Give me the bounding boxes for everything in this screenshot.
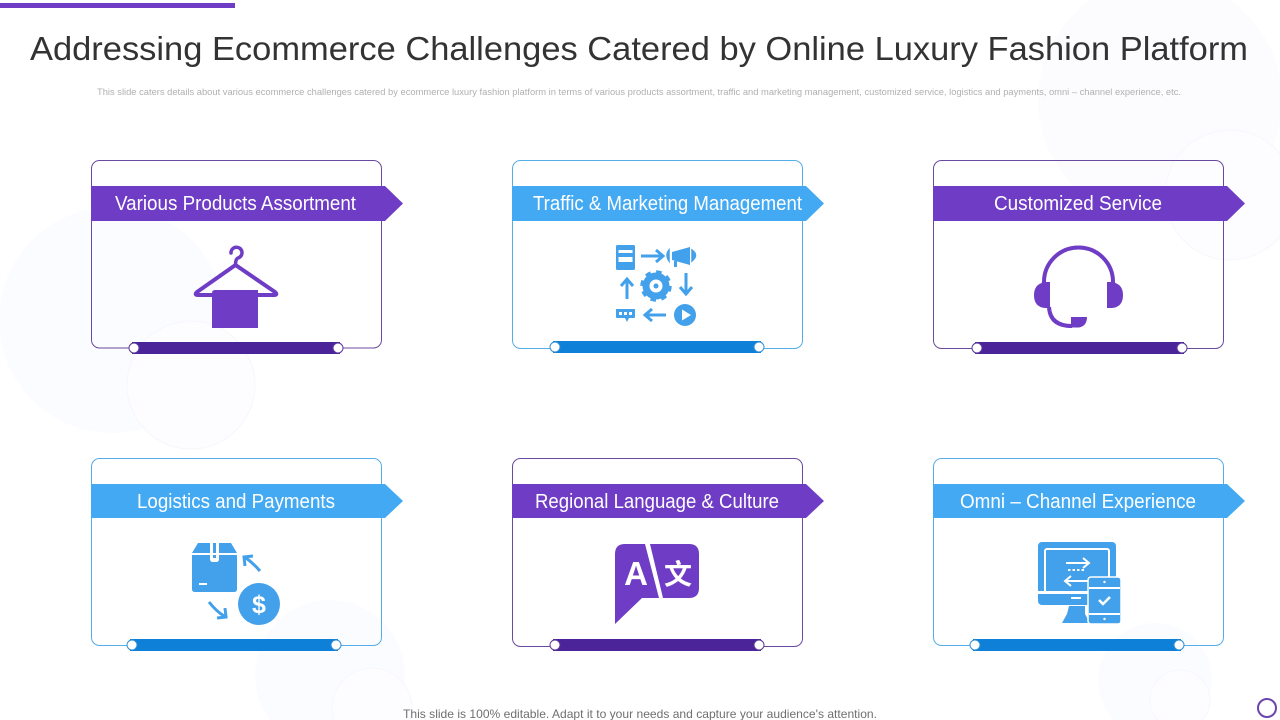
icon: hanger with towel [196, 247, 276, 328]
banner: traffic and marketing management [512, 186, 824, 221]
corner ring [1258, 699, 1276, 717]
panel: omni channel experience [933, 458, 1245, 651]
subtitle description: This slide caters details about various ecommerce challenges catered by ecommerce luxury fashion platform in terms of various products assortment, traffic and marketing management, customized service, logistics and payments, omni – channel experience, etc. [97, 87, 1181, 97]
banner: traffic and marketing management: Traffic & Marketing Management [533, 193, 802, 215]
icon: headset [1034, 248, 1123, 328]
bottom bar [970, 639, 1184, 651]
icon: translation speech bubble: A [624, 555, 648, 592]
icon: box and dollar coin: $ [252, 591, 266, 619]
bottom bar [550, 639, 764, 651]
icon: translation speech bubble: 文 [664, 559, 692, 590]
panel: traffic and marketing management [512, 160, 824, 353]
bottom bar [127, 639, 341, 651]
banner: omni channel experience [933, 484, 1245, 518]
banner: regional language and culture: Regional Language & Culture [535, 491, 779, 513]
banner: logistics and payments: Logistics and Payments [137, 491, 335, 513]
bottom bar [550, 341, 764, 353]
banner: omni channel experience: Omni – Channel Experience [960, 491, 1196, 513]
banner: customized service: Customized Service [994, 193, 1162, 215]
top accent bar [0, 3, 235, 8]
bottom bar [972, 342, 1187, 354]
panel: regional language and culture [512, 458, 824, 651]
title: Addressing Ecommerce Challenges Catered by Online Luxury Fashion Platform [30, 30, 1248, 67]
banner: logistics and payments [91, 484, 403, 518]
icon: translation speech bubble [615, 544, 699, 624]
panel: various products assortment [91, 160, 403, 354]
panel: logistics and payments [91, 458, 403, 651]
panel: customized service [933, 160, 1245, 354]
banner: various products assortment: Various Products Assortment [115, 193, 356, 215]
icon: box and dollar coin [192, 543, 280, 625]
icon: monitor and phone [1038, 542, 1121, 624]
banner: regional language and culture [512, 484, 824, 518]
icon: marketing cycle [616, 245, 696, 326]
bottom bar [129, 342, 343, 354]
banner: customized service [933, 186, 1245, 221]
banner: various products assortment [91, 186, 403, 221]
